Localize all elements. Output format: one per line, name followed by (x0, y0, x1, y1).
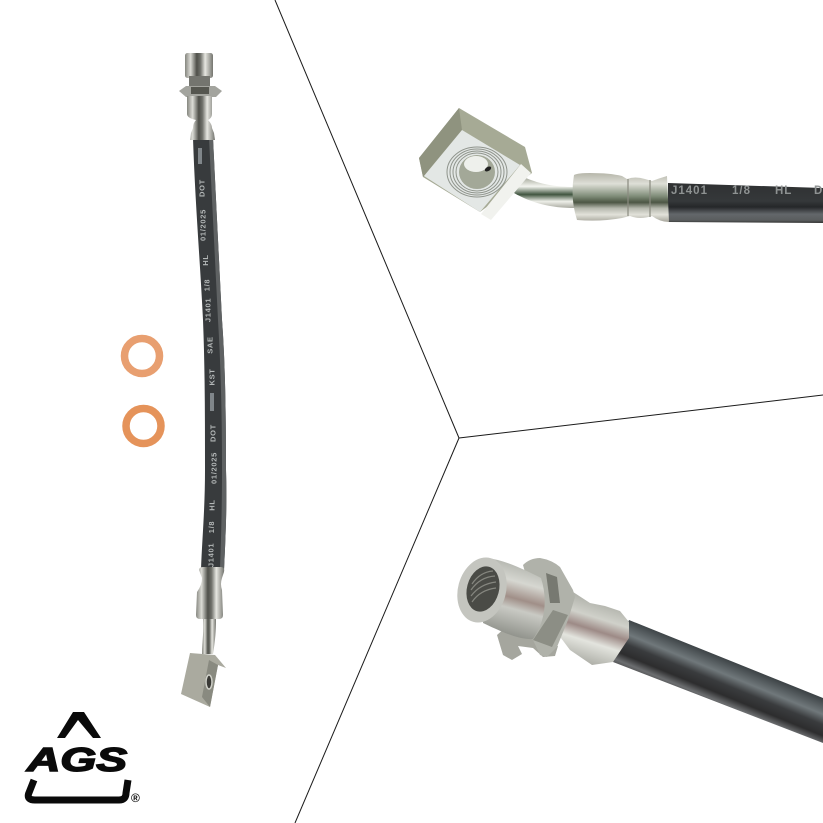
block bright face (424, 130, 520, 212)
hose printed markings: 1/8 (207, 521, 216, 533)
crimp ferrule (573, 173, 669, 222)
hose section (613, 620, 823, 743)
hose printed markings: KST (208, 368, 216, 386)
hose text (671, 185, 823, 197)
divider lines (275, 0, 823, 823)
bottom fitting (181, 567, 226, 707)
hose text: 1/8 (732, 185, 751, 197)
hose printed markings: J1401 (206, 543, 216, 567)
detail: threaded fitting end (450, 552, 823, 743)
washer upper (124, 338, 160, 374)
concentric rings (447, 147, 507, 197)
fitting barrel (483, 558, 545, 639)
hose printed markings: 01/2025 (210, 452, 218, 484)
registered mark: ® (131, 791, 140, 805)
hose printed markings: DOT (198, 179, 206, 197)
hose printed markings: SAE (206, 336, 214, 354)
hose printed markings: 01/2025 (198, 209, 208, 241)
logo upper chevron (57, 712, 101, 738)
full brake hose assembly (179, 53, 226, 707)
hex flange (523, 558, 575, 657)
ferrule ribs (628, 179, 650, 217)
hose printed dashes (198, 148, 214, 411)
hose printed markings (198, 179, 218, 567)
hose section (668, 183, 823, 223)
logo lower bracket (28, 780, 128, 800)
block shaded faces (419, 108, 532, 212)
hose printed markings: HL (201, 254, 210, 266)
crimp neck (555, 590, 629, 665)
top fitting (179, 53, 222, 140)
hose body (193, 138, 226, 570)
logo wordmark: AGS (26, 741, 127, 778)
copper washers (124, 338, 161, 444)
curved tube (514, 178, 575, 208)
bore (459, 155, 495, 189)
hose text: HL (775, 185, 792, 197)
detail: banjo block end (419, 108, 823, 223)
hose text: J1401 (671, 185, 708, 197)
threaded mouth (450, 552, 514, 628)
hose printed markings: J1401 (204, 298, 212, 322)
hose printed markings: HL (208, 499, 216, 511)
hose highlight (209, 138, 226, 570)
washer lower (126, 408, 161, 444)
AGS logo (26, 712, 140, 805)
block flange (481, 164, 531, 220)
hose printed markings: 1/8 (202, 279, 212, 291)
locking plate and ears (497, 628, 558, 660)
hose printed markings: DOT (208, 424, 218, 442)
